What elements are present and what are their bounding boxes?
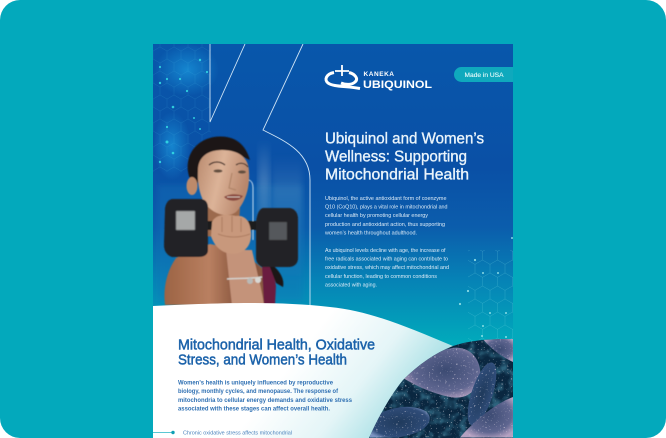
speckles <box>369 339 513 438</box>
intro paragraph 2: cellular function, leading to common conditions <box>325 274 437 280</box>
bullet text: Chronic oxidative stress affects mitochondrial <box>183 430 292 436</box>
background texture <box>369 339 513 438</box>
large mitochondrion <box>403 348 480 398</box>
tank top and hair <box>262 262 283 305</box>
right dumbbell head <box>256 208 298 267</box>
decorative outline: bottle shape <box>263 44 310 306</box>
logo: Kaneka Ubiquinol <box>326 65 432 91</box>
logo mark <box>326 65 360 88</box>
face <box>198 150 249 215</box>
finger creases <box>218 216 250 237</box>
mitochondria image <box>369 339 513 438</box>
left dumbbell head <box>164 199 208 257</box>
decorative outline: V shape <box>210 44 245 122</box>
badge: Made in USA: Made in USA <box>464 72 504 79</box>
intro paragraph 1: cellular health by promoting cellular energy <box>325 213 428 219</box>
intro paragraph 2 <box>325 248 449 288</box>
photo backdrop glows <box>153 44 303 301</box>
intro paragraph 2: associated with aging. <box>325 282 377 288</box>
intro paragraph 1: production and antioxidant action, thus supporting <box>325 222 445 228</box>
left dumbbell plate <box>176 211 195 230</box>
dumbbell handle <box>205 221 263 230</box>
ear <box>186 177 198 195</box>
neck <box>207 206 241 238</box>
title: Wellness: Supporting <box>325 148 467 166</box>
bottom right mitochondrion <box>460 397 513 438</box>
title <box>325 130 484 184</box>
intro paragraph 1: Ubiquinol, the active antioxidant form of coenzyme <box>325 196 447 202</box>
hair <box>188 137 250 188</box>
title: Ubiquinol and Women’s <box>325 130 484 148</box>
eyebrows, eyes, nose and lips <box>209 162 248 201</box>
bracelet <box>227 277 262 284</box>
intro paragraph 2: As ubiquinol levels decline with age, the increase of <box>325 248 446 254</box>
right dumbbell plate <box>269 222 287 240</box>
top right mitochondrion <box>483 339 513 362</box>
dark cellular background <box>369 339 513 438</box>
badge: Made in USA <box>454 67 513 82</box>
section heading: Stress, and Women’s Health <box>178 352 347 368</box>
section heading <box>178 338 375 368</box>
intro paragraph 2: oxidative stress, which may affect mitochondrial and <box>325 265 449 271</box>
photo: woman lifting dumbbell <box>164 137 298 305</box>
white wave panel <box>153 303 453 438</box>
inner outline behind woman <box>249 180 253 240</box>
hexagon network: bottom right <box>459 237 513 342</box>
section paragraph: mitochondria to cellular energy demands and oxidative stress <box>178 397 353 404</box>
section paragraph <box>178 380 353 412</box>
document page <box>153 44 513 438</box>
hexagon network: top left <box>153 44 211 172</box>
intro paragraph 1 <box>324 196 448 236</box>
torso and shoulder <box>164 244 264 305</box>
section paragraph: Women’s health is uniquely influenced by reproductive <box>178 380 334 386</box>
intro paragraph 1: women’s health throughout adulthood. <box>324 230 417 236</box>
bullet connector <box>153 431 175 434</box>
dumbbell <box>164 199 298 267</box>
intro paragraph 2: free radicals associated with aging can contribute to <box>325 256 449 262</box>
logo wordmark large: UBIQUINOL <box>363 79 432 91</box>
logo wordmark small: KANEKA <box>364 71 394 78</box>
fist <box>211 215 251 254</box>
intro paragraph 1: Q10 (CoQ10), plays a vital role in mitochondrial and <box>325 204 448 210</box>
title: Mitochondrial Health <box>325 166 469 184</box>
section paragraph: biology, monthly cycles, and menopause. The response of <box>178 388 339 395</box>
forearm <box>226 250 264 305</box>
capsule mitochondrion <box>468 362 496 426</box>
bottom left mitochondrion <box>369 407 430 438</box>
section heading: Mitochondrial Health, Oxidative <box>178 338 375 354</box>
section paragraph: associated with these stages can affect overall health. <box>178 406 330 412</box>
page blue gradient background <box>153 44 513 340</box>
